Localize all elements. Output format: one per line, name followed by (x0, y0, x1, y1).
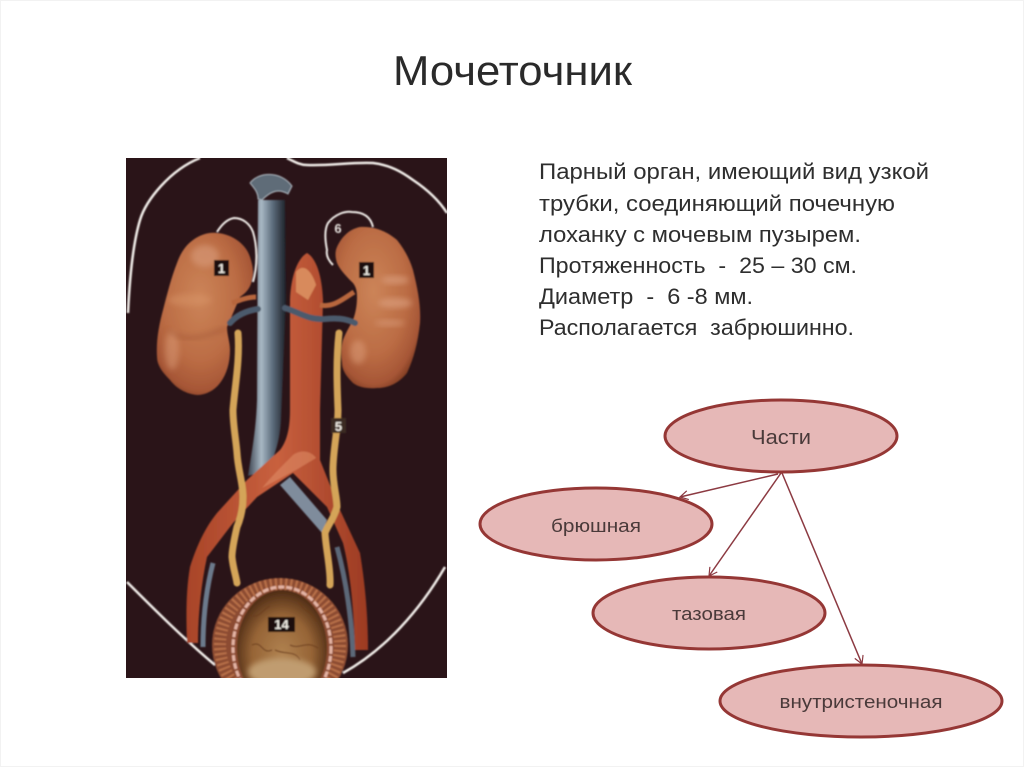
label 1 (359, 262, 374, 278)
node: внутристеночная: внутристеночная (780, 692, 942, 712)
renal arteries (232, 292, 354, 306)
label 14: 14 (274, 617, 289, 632)
node: брюшная: брюшная (551, 516, 641, 536)
label 5 (331, 418, 346, 434)
body outline (127, 158, 447, 673)
description text: лоханку с мочевым пузырем. (539, 222, 861, 247)
node: тазовая (593, 577, 825, 649)
adrenal glands (217, 212, 373, 282)
renal veins (230, 308, 355, 323)
inferior vena cava (248, 174, 292, 476)
label 1: 1 (363, 263, 370, 278)
title: Мочеточник (393, 47, 633, 94)
ureters (232, 333, 339, 585)
description text: Располагается забрюшинно. (539, 315, 854, 340)
label 6: 6 (334, 221, 342, 236)
anatomical illustration of the urinary tract (126, 158, 447, 712)
node: тазовая: тазовая (672, 604, 746, 624)
description text (539, 159, 929, 340)
description text: Диаметр - 6 -8 мм. (539, 284, 753, 309)
right kidney (336, 227, 420, 388)
diagram: parts of the ureter (480, 400, 1002, 737)
node: части (665, 400, 897, 472)
label 1 (214, 260, 229, 276)
arrows (680, 473, 862, 664)
description text: Парный орган, имеющий вид узкой (539, 159, 929, 184)
aorta and iliac arteries (186, 253, 368, 650)
label 1: 1 (218, 261, 225, 276)
node: части: Части (751, 427, 811, 449)
node: внутристеночная (720, 665, 1002, 737)
description text: трубки, соединяющий почечную (539, 191, 895, 216)
bladder (211, 577, 349, 678)
left kidney (157, 233, 253, 395)
lower vein branches (203, 477, 353, 657)
node: брюшная (480, 488, 712, 560)
label 5: 5 (335, 419, 342, 434)
description text: Протяженность - 25 – 30 см. (539, 253, 857, 278)
